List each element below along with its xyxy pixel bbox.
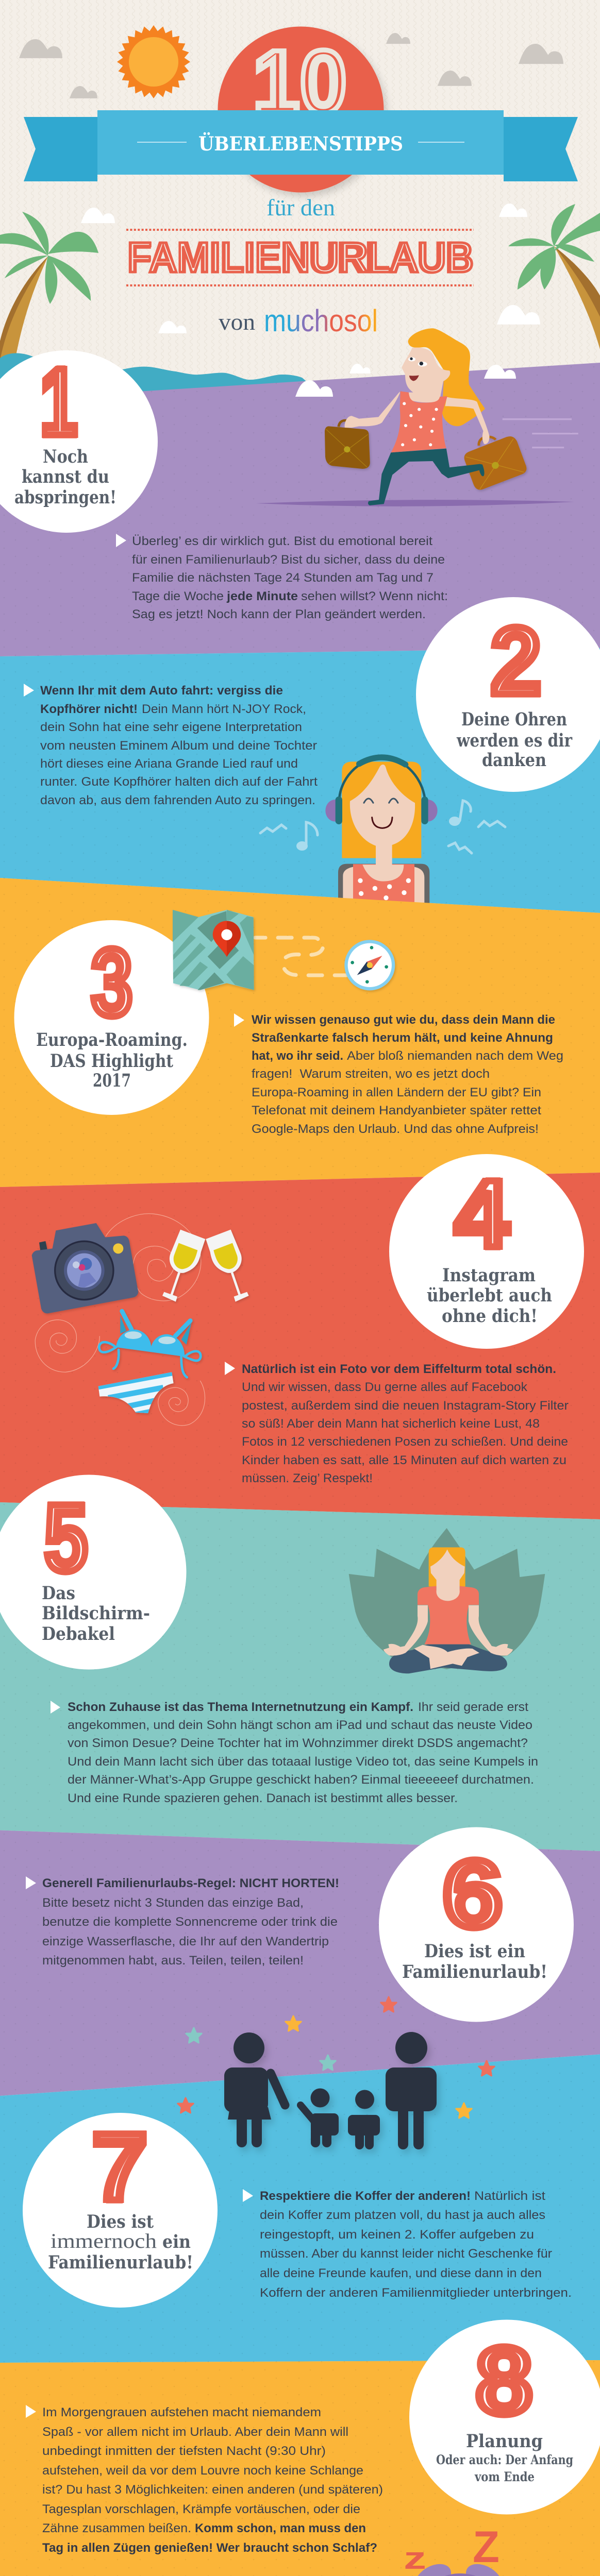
panel: tip 5 [0, 1475, 600, 1851]
panel: tip 3 [0, 878, 600, 1187]
panel: tip 2 [0, 597, 600, 913]
tip 6 badge: 6 [442, 1841, 503, 1947]
tip 6 text: benutze die komplette Sonnencreme oder trink die [42, 1915, 338, 1929]
illustration: camera, glasses, bikini [32, 1214, 249, 1426]
byline: von muchosol: von [219, 309, 255, 335]
tip 3 text: Aber bloß niemanden nach dem Weg [347, 1049, 563, 1063]
tip 1 badge: 1 [40, 349, 78, 455]
tip 1 text: Sag es jetzt! Noch kann der Plan geändert werden. [132, 607, 426, 621]
tip 6 badge: Dies ist ein [424, 1941, 525, 1962]
tip 4 badge [389, 1154, 584, 1349]
swirls [35, 1214, 205, 1426]
tip 4 text: Kinder haben es satt, alle 15 Minuten auf dich warten zu [242, 1453, 566, 1467]
tip 8 text: Im Morgengrauen aufstehen macht niemandem [42, 2405, 321, 2419]
champagne glasses [162, 1230, 249, 1302]
tip 5 badge: 5 [44, 1485, 88, 1591]
tip 3 badge [14, 920, 209, 1115]
tip 8 badge: Oder auch: Der Anfang [436, 2452, 573, 2467]
tip 6 text: Bitte besetz nicht 3 Stunden das einzige Bad, [42, 1896, 304, 1910]
tip 4 text [225, 1362, 569, 1485]
illustration: sleeping alarm clock: z [404, 2541, 426, 2575]
tip 8 text [26, 2405, 383, 2555]
tip 4 badge: überlebt auch [427, 1285, 552, 1306]
tip 3 text: Straßenkarte falsch herum hält, und keine Ahnung [252, 1031, 553, 1045]
icons: music notes and squiggles [260, 801, 505, 853]
title badge with number 10 [218, 27, 384, 193]
tip 3 text: Google-Maps den Urlaub. Und das ohne Aufpreis! [252, 1122, 539, 1136]
tip 5 text: Und dein Mann lacht sich über das totaaal lustige Video tot, das seine Kumpels in [68, 1755, 538, 1769]
tip 2 badge: 2 [490, 608, 542, 715]
tip 1 badge: abspringen! [14, 487, 116, 508]
tip 8 text: Tagesplan vorschlagen, Krämpfe vortäuschen, oder die [42, 2502, 360, 2516]
tip 7 text: alle deine Freunde kaufen, und diese dann in den [260, 2266, 542, 2280]
tip 2 text: dein Sohn hat eine sehr eigene Interpretation [40, 720, 302, 734]
tip 7 text: Respektiere die Koffer der anderen! [260, 2189, 471, 2203]
tip 8 text: unbedingt inmitten der tiefsten Nacht (9:30 Uhr) [42, 2444, 326, 2458]
tip 2 badge: Deine Ohren [461, 709, 567, 730]
tip 2 badge [416, 597, 600, 792]
tip 8 badge: vom Ende [474, 2469, 535, 2484]
illustration: running woman with suitcases [256, 328, 578, 506]
tip 5 text [51, 1700, 538, 1805]
tip 8 text: Tag in allen Zügen genießen! Wer braucht schon Schlaf? [42, 2541, 377, 2555]
tip 3 text: Europa-Roaming in allen Ländern der EU gibt? Ein [252, 1086, 541, 1099]
map pin [213, 921, 227, 957]
tip 6 badge: Familienurlaub! [402, 1961, 547, 1982]
tip 3 text: fragen! Warum streiten, wo es jetzt doch [252, 1067, 490, 1081]
illustration: sleeping alarm clock [357, 2522, 576, 2576]
panel: tip 4 [0, 1154, 600, 1519]
panel: tip 6 [0, 1827, 600, 2096]
tip 5 badge: Bildschirm- [42, 1603, 150, 1624]
panel: tip 1 [0, 204, 600, 656]
tip 2 text: hört dieses eine Ariana Grande Lied rauf und [40, 757, 298, 771]
tip 2 text: vom neusten Eminem Album und deine Tochter [40, 739, 317, 753]
icon: sun [117, 25, 190, 98]
icon: right palm tree [508, 204, 600, 349]
tip 7 text: müssen. Aber du kannst leider nicht Geschenke für [260, 2247, 552, 2261]
tip 6 badge: 6 [442, 1841, 503, 1947]
tip 7 badge: 7 [92, 2114, 148, 2221]
tip 5 text: von Simon Desue? Deine Tochter hat im Wohnzimmer direkt DSDS angemacht? [68, 1736, 528, 1750]
tip 3 badge: 2017 [93, 1070, 131, 1091]
tip 7 badge: 7 [92, 2114, 148, 2221]
byline: von muchosol: muchosol [264, 303, 378, 338]
tip 1 badge [0, 349, 158, 533]
subtitle: für den: für den [266, 194, 335, 221]
tip 6 text: mitgenommen habt, aus. Teilen, teilen, teilen! [42, 1954, 304, 1968]
tip 6 text: Generell Familienurlaubs-Regel: NICHT HORTEN! [42, 1876, 339, 1890]
tip 8 text: aufstehen, weil da vor dem Louvre noch keine Schlange [42, 2464, 363, 2478]
title badge with number 10: 10 [253, 31, 347, 131]
tip 1 text: Familie die nächsten Tage 24 Stunden am Tag und 7 [132, 571, 434, 585]
tip 5 text: Und eine Runde spazieren gehen. Danach ist bestimmt alles besser. [68, 1791, 458, 1805]
tip 4 text: müssen. Zeig’ Respekt! [242, 1471, 373, 1485]
tip 1 badge: 1 [40, 349, 78, 455]
white clouds [81, 204, 540, 397]
tip 5 text: Schon Zuhause ist das Thema Internetnutzung ein Kampf. [68, 1700, 413, 1714]
sea waves [0, 353, 309, 412]
illustration: family silhouette with stars [178, 1997, 494, 2149]
tip 1 text: Tage die Woche [132, 589, 224, 603]
tip 1 badge: kannst du [22, 466, 109, 487]
tip 4 badge: Instagram [442, 1265, 536, 1286]
bikini [94, 1311, 201, 1417]
tip 1 text [116, 534, 448, 621]
tip 8 text: Komm schon, man muss den [195, 2521, 366, 2535]
tip 7 badge: immernoch [51, 2229, 157, 2252]
tip 3 text: Telefonat mit deinem Handyanbieter später rettet [252, 1104, 541, 1117]
compass [344, 940, 395, 990]
panel: tip 7 [0, 1997, 600, 2363]
title ribbon: ÜBERLEBENSTIPPS [198, 132, 403, 155]
tip 8 text: Spaß - vor allem nicht im Urlaub. Aber dein Mann will [42, 2425, 348, 2439]
panel: tip 8 [0, 2319, 600, 2576]
tip 7 text: Koffern der anderen Familienmitglieder unterbringen. [260, 2286, 572, 2300]
tip 5 text: der Männer-What’s-App Gruppe geschickt haben? Einmal tieeeeeef durchatmen. [68, 1773, 534, 1787]
tip 7 badge: Familienurlaub! [48, 2252, 193, 2273]
illustration: map, route and compass [173, 910, 395, 990]
tip 7 text [243, 2189, 572, 2300]
tip 2 text [24, 684, 318, 807]
title badge with number 10: 10 [253, 31, 347, 131]
tip 8 badge: 8 [475, 2328, 533, 2434]
tip 2 badge: danken [482, 750, 546, 771]
tip 8 text: ist? Du hast 3 Möglichkeiten: einen anderen (und späteren) [42, 2483, 383, 2497]
tip 4 badge: ohne dich! [442, 1306, 538, 1327]
tip 4 text: so süß! Aber dein Mann hat sicherlich keine Lust, 48 [242, 1417, 540, 1431]
tip 1 badge: Noch [43, 446, 88, 467]
tip 2 badge: werden es dir [456, 730, 572, 751]
tip 4 text: Fotos in 12 verschiedenen Posen zu schießen. Und deine [242, 1435, 568, 1449]
tip 5 badge [0, 1475, 187, 1669]
grey cloud group [19, 33, 563, 98]
tip 5 text: Ihr seid gerade erst [418, 1700, 528, 1714]
tip 5 text: angekommen, und dein Sohn hängt schon am iPad und schaut das neuste Video [68, 1718, 532, 1732]
tip 3 badge: 3 [91, 929, 133, 1036]
tip 3 badge: 3 [91, 929, 133, 1036]
illustration: sleeping alarm clock: Z [473, 2522, 499, 2572]
tip 4 text: postest, außerdem sind die neuen Instagram-Story Filter [242, 1399, 569, 1413]
tip 7 badge: Dies ist [87, 2211, 154, 2232]
tip 8 badge [409, 2319, 600, 2514]
map [173, 910, 254, 990]
tip 4 text: Natürlich ist ein Foto vor dem Eiffelturm total schön. [242, 1362, 556, 1376]
tip 2 text: runter. Gute Kopfhörer halten dich auf der Fahrt [40, 775, 318, 789]
tip 3 badge: DAS Highlight [50, 1050, 173, 1072]
tip 5 badge: Das [42, 1583, 75, 1604]
tip 6 text: einzige Wasserflasche, die Ihr auf den Wandertrip [42, 1935, 329, 1948]
tip 3 badge: Europa-Roaming. [36, 1029, 188, 1050]
tip 1 text: sehen willst? Wenn nicht: [301, 589, 448, 603]
tip 1 text: für einen Familienurlaub? Bist du sicher, dass du deine [132, 553, 445, 567]
tip 7 badge: ein [162, 2231, 191, 2252]
headline: Familienurlaub: FAMILIENURLAUB [127, 233, 474, 281]
tip 8 text: Zähne zusammen beißen. [42, 2521, 191, 2535]
tip 3 text: hat, wo ihr seid. [252, 1049, 343, 1063]
tip 4 badge: 4 [454, 1161, 509, 1267]
title ribbon [24, 110, 578, 181]
tip 6 text [26, 1876, 339, 1968]
tip 2 badge: 2 [490, 608, 542, 715]
headline: Familienurlaub: FAMILIENURLAUB [127, 233, 474, 281]
camera [32, 1223, 138, 1313]
tip 7 text: dein Koffer zum platzen voll, du hast ja auch alles [260, 2208, 545, 2222]
tip 5 badge: Debakel [42, 1623, 115, 1645]
tip 2 text: Kopfhörer nicht! [40, 702, 138, 716]
tip 8 badge: Planung [466, 2431, 543, 2452]
tip 1 text: jede Minute [226, 589, 298, 603]
icon: left palm tree [0, 212, 98, 381]
tip 7 text: Natürlich ist [474, 2189, 545, 2203]
tip 4 badge: 4 [454, 1161, 509, 1267]
tip 7 text: reingestopft, um keinen 2. Koffer aufgeben zu [260, 2228, 534, 2242]
route dashes [255, 938, 346, 975]
tip 2 text: davon ab, aus dem fahrenden Auto zu springen. [40, 793, 315, 807]
tip 2 text: Dein Mann hört N-JOY Rock, [142, 702, 306, 716]
tip 4 text: Und wir wissen, dass Du gerne alles auf Facebook [242, 1380, 528, 1394]
tip 8 badge: 8 [475, 2328, 533, 2434]
tip 5 badge: 5 [44, 1485, 88, 1591]
tip 7 badge [23, 2113, 218, 2308]
illustration: meditating woman on lotus [349, 1528, 545, 1673]
illustration: girl with headphones [325, 757, 438, 907]
tip 6 badge [379, 1827, 574, 2022]
tip 2 text: Wenn Ihr mit dem Auto fahrt: vergiss die [40, 684, 283, 698]
byline: von muchosol [219, 303, 378, 338]
tip 3 text: Wir wissen genauso gut wie du, dass dein Mann die [252, 1013, 555, 1027]
tip 1 text: Überleg’ es dir wirklich gut. Bist du emotional bereit [132, 534, 432, 548]
tip 3 text [234, 1013, 563, 1136]
